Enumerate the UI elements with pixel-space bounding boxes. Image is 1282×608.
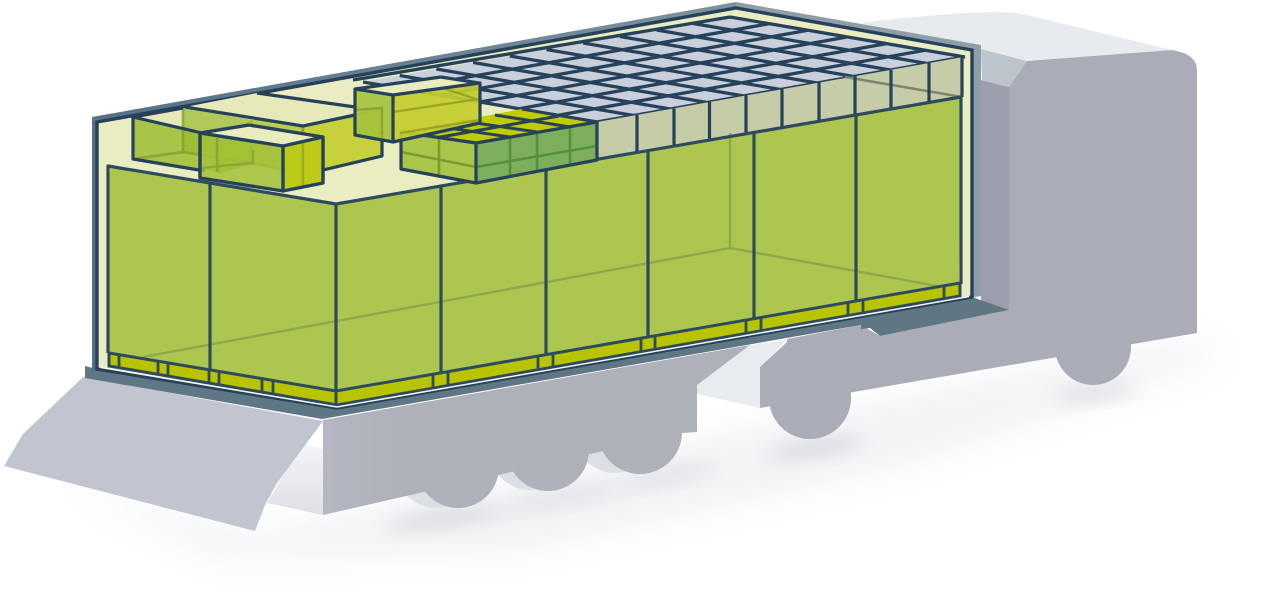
tall crate: centre <box>355 77 480 142</box>
ground shadow <box>60 340 1230 560</box>
container walls <box>92 2 981 408</box>
cab roof <box>860 12 1172 61</box>
rear wheels, far side <box>396 393 655 508</box>
gap behind open door <box>267 444 323 515</box>
right wall strip <box>736 2 981 298</box>
cab lower body <box>760 50 1197 408</box>
truck body <box>4 12 1197 531</box>
block left face <box>401 132 476 183</box>
load faces <box>108 97 961 391</box>
row of cartons: front faces <box>597 57 963 160</box>
large crate: centre rear <box>185 93 383 175</box>
grid of cartons: top faces <box>353 17 965 122</box>
rear wall seen through load <box>143 133 959 357</box>
small crate: front left <box>200 125 324 191</box>
container interior <box>97 8 972 408</box>
cartons block: green <box>401 109 597 183</box>
block outline <box>401 122 597 183</box>
cab wheels <box>769 309 1131 439</box>
cab rear side <box>981 80 1009 312</box>
load outlines <box>108 97 961 391</box>
floor edge <box>85 297 1009 419</box>
trailer wheels <box>417 390 682 508</box>
pallet base <box>109 283 960 405</box>
main pallet load <box>108 97 961 391</box>
block right face <box>476 122 597 183</box>
small crate: rear left <box>133 108 253 172</box>
top wall strip <box>92 2 736 122</box>
block top <box>401 109 597 143</box>
space between trailer and cab <box>697 340 787 408</box>
pallet blocks <box>119 286 944 395</box>
pallets <box>101 283 969 407</box>
trailer side <box>323 345 750 515</box>
open rear door <box>4 377 323 531</box>
pallet outline <box>109 283 960 405</box>
white floor line <box>101 296 969 407</box>
cab windscreen facet <box>981 49 1027 87</box>
left wall strip <box>92 117 97 370</box>
